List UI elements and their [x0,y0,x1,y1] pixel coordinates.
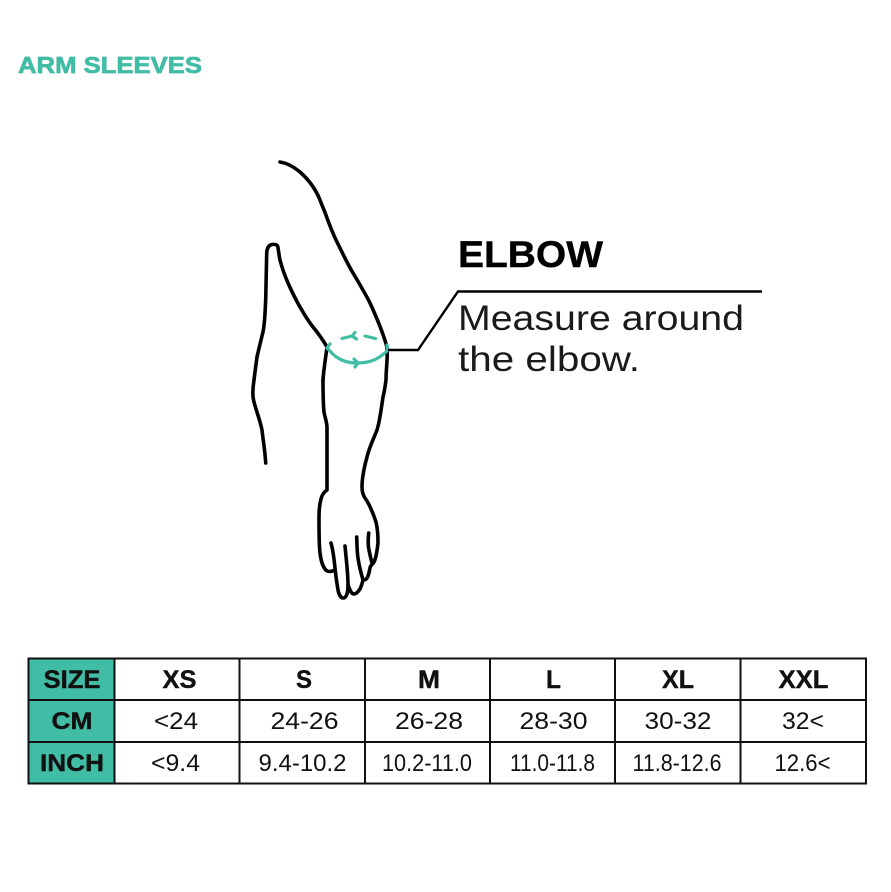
title: ARM SLEEVES [18,52,202,78]
row: cm: CM [52,708,92,735]
icon: measurement band around elbow [327,332,388,367]
text block: measurement instruction: Measure around [458,299,744,338]
row: inch: INCH [40,750,104,777]
row: cm: 26-28 [395,708,463,735]
row: cm: 24-26 [270,708,338,735]
heading: elbow: ELBOW [458,234,603,275]
row: size: S [296,666,312,694]
row: inch: 9.4-10.2 [258,750,346,777]
row: inch: 12.6< [774,750,830,777]
table label column [28,658,114,784]
row: inch: 10.2-11.0 [382,750,472,777]
row: size: SIZE [44,666,100,694]
row: size: XXL [778,666,828,694]
text block: measurement instruction [458,299,744,379]
row: cm: <24 [154,708,198,735]
row: size: M [418,666,440,694]
row: size: L [546,666,561,694]
row: cm [52,708,824,735]
row: inch: <9.4 [151,750,200,777]
row: inch [40,750,830,777]
size table [28,658,866,784]
callout leader line [388,292,762,350]
row: size: XS [162,666,196,694]
row: size: XL [662,666,694,694]
row: inch: 11.8-12.6 [632,750,722,777]
text block: measurement instruction: the elbow. [458,340,640,379]
row: inch: 11.0-11.8 [510,750,595,777]
row: cm: 30-32 [644,708,712,735]
row: cm: 28-30 [520,708,588,735]
row: cm: 32< [782,708,824,735]
icon: arm illustration [253,162,387,598]
row: size [44,666,828,694]
